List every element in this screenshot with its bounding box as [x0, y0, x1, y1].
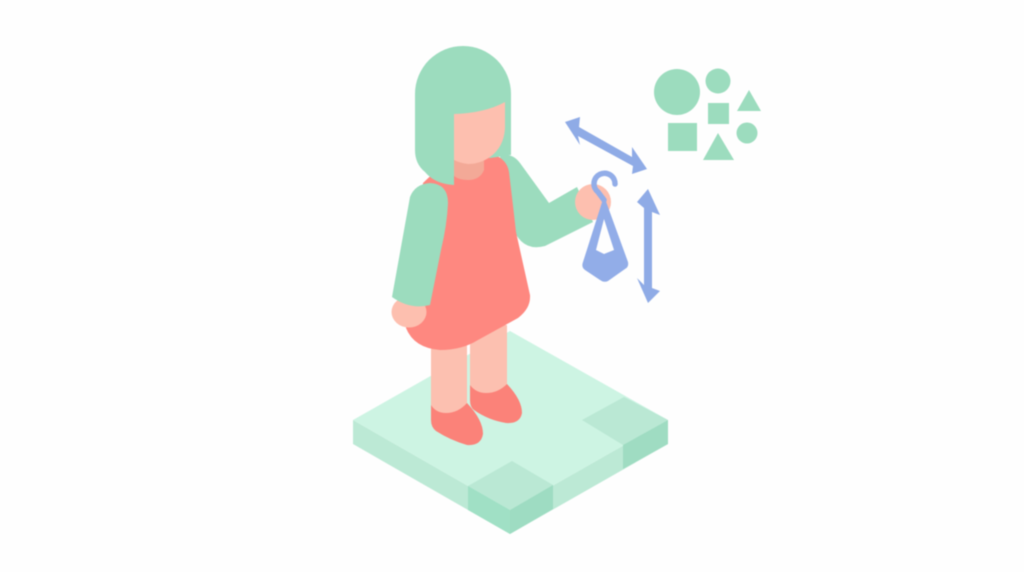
platform — [353, 331, 668, 534]
small square — [708, 103, 729, 124]
near shoe — [431, 403, 483, 445]
far leg — [470, 325, 507, 393]
tag body — [582, 196, 628, 282]
large triangle — [703, 133, 734, 160]
small circle top — [706, 68, 730, 94]
shapes cluster — [654, 68, 761, 160]
near arm — [392, 183, 448, 306]
vertical double arrow — [637, 189, 660, 303]
face — [454, 102, 505, 164]
small circle right — [736, 122, 758, 144]
far shoe — [470, 384, 522, 423]
hand holding tag — [575, 184, 611, 220]
front corner tile — [468, 461, 553, 534]
hanging tag — [582, 173, 628, 282]
dress — [406, 155, 530, 350]
triangle top right — [737, 90, 761, 111]
hair — [415, 46, 511, 185]
hook — [594, 173, 615, 200]
neck — [454, 155, 484, 180]
right corner tile — [582, 397, 668, 469]
near leg — [431, 335, 467, 413]
far arm — [500, 155, 593, 247]
near hand — [392, 296, 426, 328]
large circle — [654, 69, 700, 115]
diagonal double arrow — [565, 117, 647, 174]
figure — [392, 46, 611, 445]
large square — [668, 123, 697, 151]
